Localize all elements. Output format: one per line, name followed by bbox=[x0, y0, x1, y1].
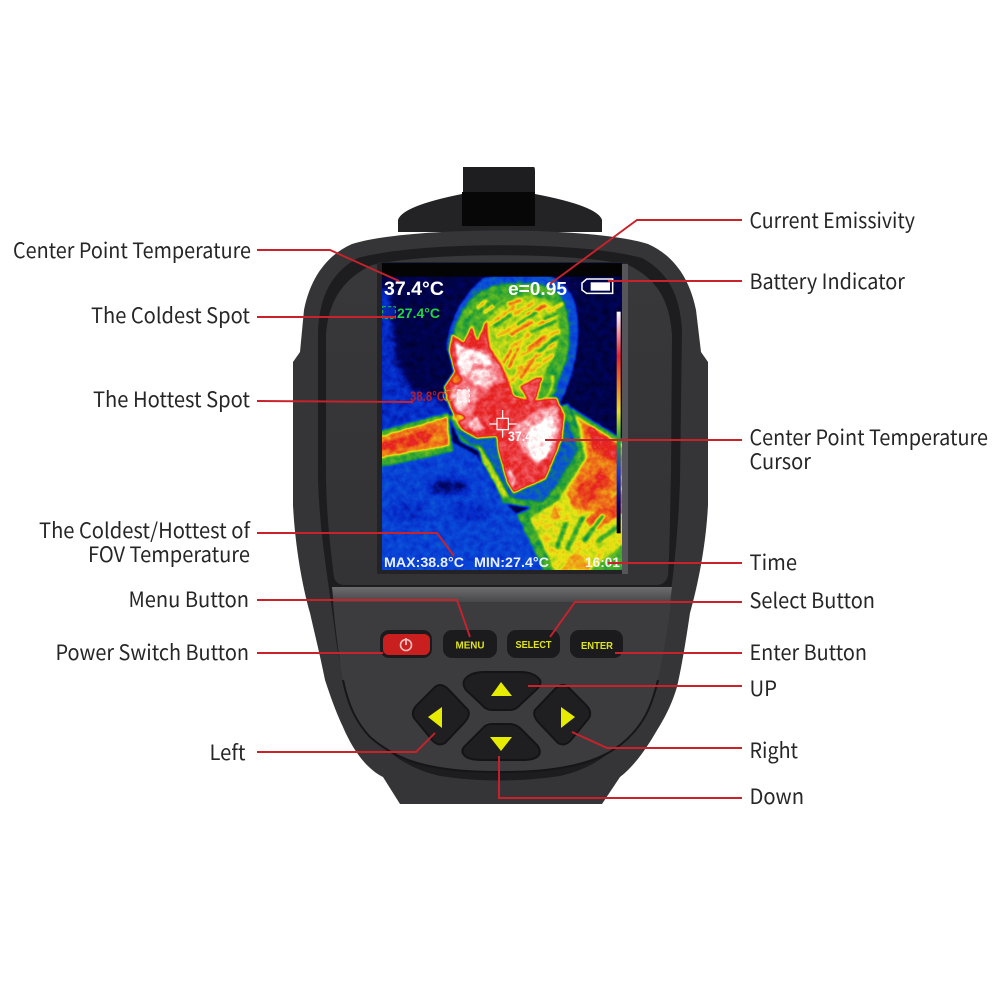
leader line: select button bbox=[550, 602, 742, 637]
leader line: hottest spot bbox=[257, 401, 413, 402]
label: Right: Right bbox=[750, 735, 798, 765]
hair halo bbox=[447, 276, 578, 405]
keypad buttons bbox=[380, 630, 623, 760]
label: Center Point Temperature Cursor: Cursor bbox=[750, 446, 812, 476]
coldest spot marker bbox=[383, 307, 395, 319]
keypad panel bbox=[332, 587, 672, 772]
max readout: MAX:38.8°C bbox=[384, 554, 464, 570]
body blue bbox=[377, 442, 550, 575]
label: Select Button: Select Button bbox=[750, 585, 875, 615]
hottest spot marker bbox=[443, 390, 469, 402]
time readout: 16:01 bbox=[585, 554, 620, 570]
emissivity readout: e=0.95 bbox=[508, 279, 567, 299]
top tab bbox=[463, 167, 535, 215]
hottest spot readout: 38.8°C bbox=[410, 388, 445, 404]
cursor readout: 37.4°C bbox=[508, 428, 546, 444]
coldest spot readout: 27.4°C bbox=[397, 305, 440, 321]
leader line: coldest spot bbox=[257, 316, 395, 318]
thermal image on screen bbox=[370, 255, 637, 588]
select button: SELECT bbox=[516, 640, 552, 651]
ear bbox=[535, 370, 558, 406]
enter button: ENTER bbox=[581, 641, 614, 652]
screen readouts bbox=[384, 278, 620, 570]
leader line: menu button bbox=[257, 600, 470, 637]
right button bbox=[534, 685, 590, 744]
leader line: power button bbox=[257, 652, 383, 654]
center cursor bbox=[489, 410, 517, 438]
leader line: emissivity bbox=[550, 220, 742, 284]
face bbox=[444, 320, 533, 438]
center temperature readout: 37.4°C bbox=[384, 278, 444, 300]
down button bbox=[462, 724, 540, 760]
menu button: MENU bbox=[456, 640, 484, 652]
label: The Coldest/Hottest of FOV Temperature: The Coldest/Hottest of bbox=[39, 515, 251, 545]
label: Enter Button: Enter Button bbox=[750, 637, 867, 667]
leader line: up button bbox=[528, 685, 742, 687]
label: Center Point Temperature Cursor: Center Point Temperature bbox=[750, 422, 988, 452]
leader line: left button bbox=[257, 733, 435, 752]
temperature scale bar bbox=[617, 312, 621, 533]
power button bbox=[380, 630, 432, 658]
lens collar bbox=[398, 194, 602, 232]
up button bbox=[464, 672, 540, 710]
label: Time: Time bbox=[750, 547, 797, 577]
leader line: down button bbox=[499, 756, 742, 798]
screen bezel bbox=[377, 262, 628, 574]
leader line: coldest/hottest FOV bbox=[257, 533, 454, 556]
top black bar bbox=[382, 263, 622, 277]
right shoulder bbox=[517, 407, 627, 575]
thermal heat field bbox=[370, 255, 637, 588]
select button bbox=[507, 630, 560, 658]
enter button bbox=[570, 630, 623, 658]
hair bbox=[453, 283, 569, 402]
label: UP: UP bbox=[750, 673, 777, 703]
label: Down: Down bbox=[750, 781, 804, 811]
battery icon bbox=[582, 279, 613, 293]
main casing bbox=[293, 230, 708, 804]
neck bbox=[496, 398, 565, 493]
label: The Coldest Spot: The Coldest Spot bbox=[91, 300, 250, 330]
hair streaks bbox=[470, 298, 563, 382]
device: thermal camera body bbox=[293, 167, 708, 804]
label: Left: Left bbox=[210, 737, 246, 767]
label: Center Point Temperature: Center Point Temperature bbox=[13, 235, 251, 265]
leader line: battery bbox=[608, 280, 742, 282]
leader line: enter button bbox=[615, 652, 742, 654]
leader line: center point temperature bbox=[257, 250, 399, 281]
label: The Hottest Spot: The Hottest Spot bbox=[93, 384, 250, 414]
left button bbox=[413, 685, 469, 744]
min readout: MIN:27.4°C bbox=[474, 554, 549, 570]
label: The Coldest/Hottest of FOV Temperature: FOV Temperature bbox=[88, 539, 250, 569]
arm bbox=[377, 412, 453, 468]
leader line: time bbox=[608, 562, 742, 564]
dark inner band bbox=[318, 245, 682, 780]
cold background bbox=[370, 255, 637, 588]
menu button bbox=[443, 630, 497, 658]
screen surround bbox=[326, 255, 672, 585]
leader line: cursor bbox=[545, 439, 742, 441]
label: Power Switch Button: Power Switch Button bbox=[56, 637, 249, 667]
label: Menu Button: Menu Button bbox=[128, 584, 249, 614]
label: Current Emissivity: Current Emissivity bbox=[750, 205, 915, 235]
collar bbox=[448, 403, 585, 510]
label: Battery Indicator: Battery Indicator bbox=[750, 266, 906, 296]
leader line: right button bbox=[572, 732, 742, 748]
